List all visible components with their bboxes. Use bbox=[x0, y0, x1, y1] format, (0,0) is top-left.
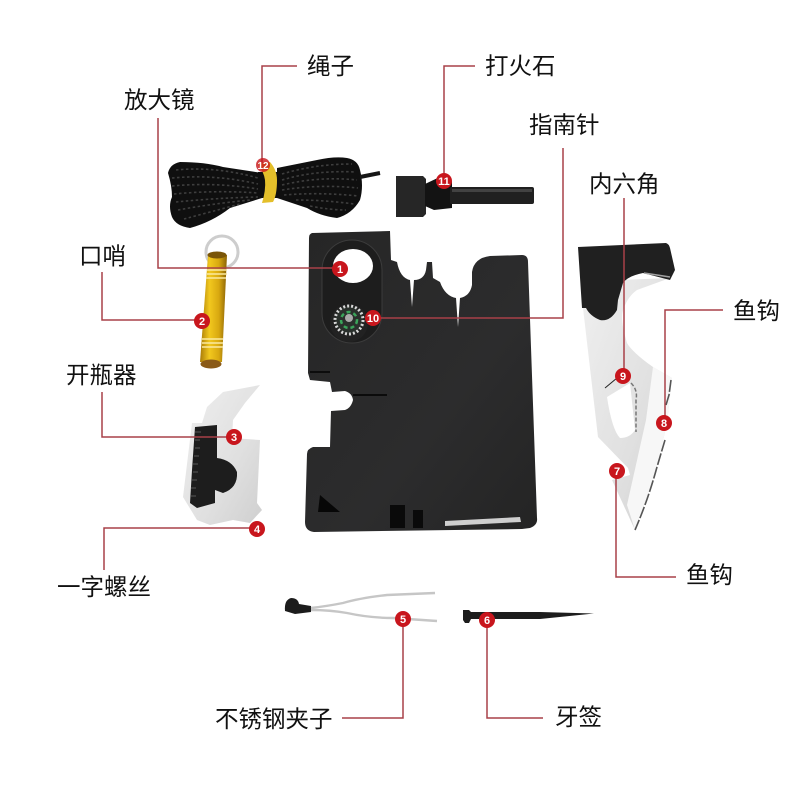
label: magnifier: 放大镜 bbox=[124, 87, 194, 113]
icon: bottom slots bbox=[390, 505, 423, 528]
icon: tweezers bbox=[285, 593, 437, 621]
icon: fire starter bbox=[396, 175, 534, 217]
badge: 5: 5 bbox=[400, 614, 406, 626]
label: toothpick: 牙签 bbox=[555, 704, 602, 730]
badge: 4 bbox=[249, 521, 265, 537]
badge: 12: 12 bbox=[257, 161, 269, 172]
badge: 3 bbox=[226, 429, 242, 445]
icon: bottle opener bbox=[183, 385, 262, 525]
badge: 8 bbox=[656, 415, 672, 431]
badge: 2: 2 bbox=[199, 316, 205, 328]
badge: 5 bbox=[395, 611, 411, 627]
icon: magnifier and compass frame bbox=[322, 240, 382, 343]
icon: toothpick bbox=[463, 610, 594, 623]
badge: 11: 11 bbox=[438, 176, 450, 188]
badge: 10: 10 bbox=[367, 313, 379, 325]
label: fire starter: 打火石 bbox=[485, 53, 556, 79]
icon: magnifier lens bbox=[333, 249, 373, 283]
icon: whistle bbox=[200, 236, 238, 368]
icon: triangle hole bbox=[318, 495, 340, 512]
badge: 10 bbox=[365, 310, 381, 326]
label: compass: 指南针 bbox=[529, 112, 600, 138]
icon: knife blade bbox=[578, 243, 675, 530]
icon: compass bbox=[330, 304, 368, 342]
label: tweezers: 不锈钢夹子 bbox=[215, 706, 332, 732]
label: flat screwdriver: 一字螺丝 bbox=[57, 574, 151, 600]
badge: 9 bbox=[615, 368, 631, 384]
badge: 1 bbox=[332, 261, 348, 277]
icon: rope bundle bbox=[168, 157, 380, 228]
badge: 6: 6 bbox=[484, 615, 490, 627]
label: hex wrench: 内六角 bbox=[589, 171, 660, 197]
label: bottle opener: 开瓶器 bbox=[66, 362, 136, 388]
badge: 7 bbox=[609, 463, 625, 479]
badge: 12 bbox=[256, 158, 270, 172]
label: rope: 绳子 bbox=[307, 53, 354, 79]
panel: credit card tool bbox=[305, 231, 537, 532]
badge: 9: 9 bbox=[620, 371, 626, 383]
badge: 3: 3 bbox=[231, 432, 237, 444]
label: whistle: 口哨 bbox=[79, 243, 126, 269]
badge: 4: 4 bbox=[254, 524, 261, 536]
badge: 8: 8 bbox=[661, 418, 667, 430]
label: fish hook 7: 鱼钩 bbox=[686, 562, 733, 588]
badge: 6 bbox=[479, 612, 495, 628]
icon: steel strip bbox=[445, 517, 521, 526]
label: fish hook 8: 鱼钩 bbox=[733, 298, 780, 324]
badge: 7: 7 bbox=[614, 466, 620, 478]
badge: 11 bbox=[436, 173, 452, 189]
badge: 2 bbox=[194, 313, 210, 329]
connector lines bbox=[102, 66, 723, 718]
badge: 1: 1 bbox=[337, 264, 343, 276]
